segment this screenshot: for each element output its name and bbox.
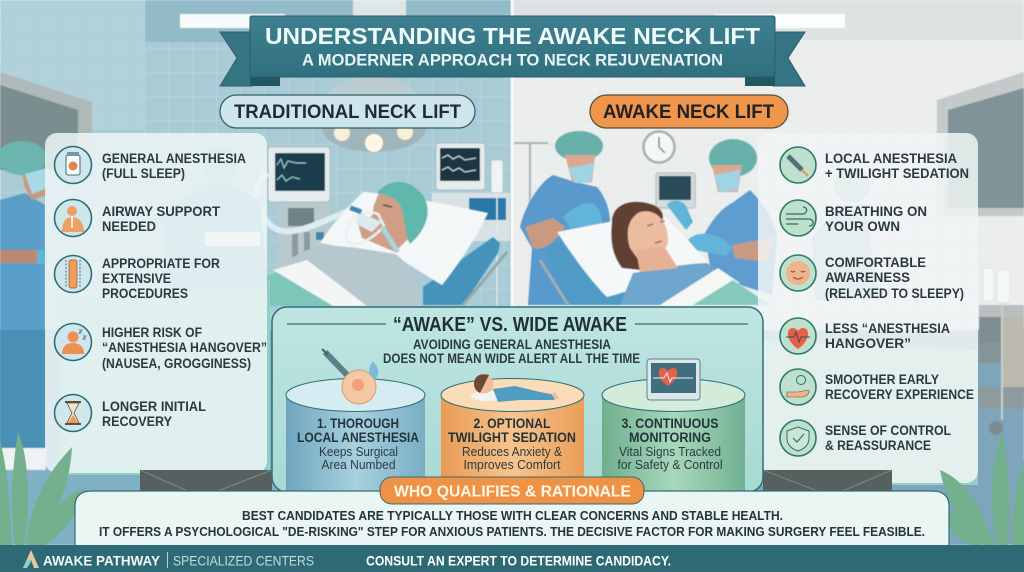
text: twilight sedation: 2. OPTIONAL — [474, 416, 550, 431]
text: rationale: IT OFFERS A PSYCHOLOGICAL "DE-RISKING" STEP FOR ANXIOUS PATIENTS. THE DECISIVE FACTOR FOR MAKING SURGERY FEEL FEASIBLE. — [99, 524, 925, 539]
text: extensive procedures: EXTENSIVE — [102, 271, 171, 286]
awake scene equipment — [514, 132, 695, 230]
icon: logo — [23, 550, 39, 568]
text: brand — [43, 552, 314, 568]
text: local anesthesia — [825, 151, 969, 181]
text: call to action: CONSULT AN EXPERT TO DETERMINE CANDIDACY. — [366, 552, 671, 568]
ghost surgeon behind left panel — [60, 147, 270, 475]
text: thorough local anesthesia: Keeps Surgical — [319, 445, 398, 459]
footer bar — [0, 545, 1024, 572]
subheading: A MODERNER APPROACH TO NECK REJUVENATION — [302, 52, 723, 70]
nurse two — [667, 139, 777, 295]
text: extensive procedures: APPROPRIATE FOR — [102, 256, 220, 271]
text: subtitle: DOES NOT MEAN WIDE ALERT ALL THE TIME — [383, 351, 640, 366]
text: general anesthesia — [102, 151, 246, 181]
text: comfortable awareness: COMFORTABLE — [825, 255, 926, 270]
text: continuous monitoring: for Safety & Control — [618, 458, 722, 472]
text: brand: AWAKE PATHWAY — [43, 552, 161, 568]
text: local anesthesia: LOCAL ANESTHESIA — [825, 151, 957, 166]
cart with bottles — [979, 268, 1024, 435]
text: thorough local anesthesia: 1. THOROUGH — [317, 416, 399, 431]
text: continuous monitoring: MONITORING — [629, 430, 711, 445]
text: longer recovery: RECOVERY — [102, 414, 172, 429]
icon: relaxed face — [780, 255, 816, 291]
panel: who qualifies and rationale — [75, 477, 949, 546]
text: comfortable awareness — [825, 255, 964, 301]
text: airway support: NEEDED — [102, 219, 156, 234]
text: subtitle — [383, 337, 640, 366]
text: extensive procedures: PROCEDURES — [102, 286, 188, 301]
pill: traditional neck lift — [220, 95, 475, 128]
text: sense of control: & REASSURANCE — [825, 438, 931, 453]
icon: airway — [54, 200, 92, 236]
text: extensive procedures — [102, 256, 220, 301]
panel: awake vs wide awake — [272, 307, 763, 492]
background: traditional operating room — [0, 0, 511, 545]
text: sense of control: SENSE OF CONTROL — [825, 423, 951, 438]
icon: hand — [780, 369, 816, 405]
title banner — [220, 16, 805, 86]
pill: awake neck lift: AWAKE NECK LIFT — [603, 102, 774, 123]
text: continuous monitoring — [618, 416, 722, 472]
text: breathing on your own: BREATHING ON — [825, 204, 927, 219]
icon: breath — [780, 200, 816, 236]
text: less anesthesia hangover — [825, 321, 950, 351]
icon: shield — [780, 420, 816, 456]
icon: extensive procedure — [54, 256, 92, 292]
heading: UNDERSTANDING THE AWAKE NECK LIFT — [265, 23, 760, 49]
text: airway support: AIRWAY SUPPORT — [102, 204, 221, 219]
text: general anesthesia: GENERAL ANESTHESIA — [102, 151, 246, 166]
text: less anesthesia hangover: LESS “ANESTHESIA — [825, 321, 950, 336]
text: twilight sedation: Reduces Anxiety & — [462, 445, 563, 459]
text: anesthesia hangover risk: HIGHER RISK OF — [102, 325, 202, 340]
text: longer recovery — [102, 399, 206, 429]
text: breathing on your own — [825, 204, 927, 234]
plants — [0, 432, 1024, 546]
surgical lamp — [320, 60, 426, 152]
text: sense of control — [825, 423, 951, 453]
icon: heart — [780, 318, 816, 354]
text: breathing on your own: YOUR OWN — [825, 219, 900, 234]
text: twilight sedation — [448, 416, 576, 472]
icon: vitals monitor — [647, 359, 700, 400]
text: anesthesia hangover risk: (NAUSEA, GROGGINESS) — [102, 356, 251, 371]
left benefits panel — [45, 133, 267, 473]
text: subtitle: AVOIDING GENERAL ANESTHESIA — [413, 337, 611, 352]
icon: groggy person — [54, 324, 92, 360]
icon: resting patient — [471, 374, 557, 402]
text: rationale — [99, 508, 925, 539]
bed bases — [140, 470, 892, 492]
text: smoother recovery: RECOVERY EXPERIENCE — [825, 387, 974, 402]
icon: syringe — [780, 147, 816, 183]
awake patient — [540, 202, 770, 305]
cylinder 3: continuous monitoring — [602, 359, 745, 492]
monitors and machines: traditional side — [256, 143, 510, 305]
patient under general anesthesia — [230, 182, 507, 306]
text: smoother recovery — [825, 372, 974, 402]
icon: anesthesia bottle — [54, 146, 92, 184]
pill: traditional neck lift: TRADITIONAL NECK LIFT — [234, 102, 461, 123]
heading: awake vs wide awake: “AWAKE” VS. WIDE AWAKE — [393, 314, 627, 336]
text: less anesthesia hangover: HANGOVER” — [825, 336, 911, 351]
cylinder 2: twilight sedation — [441, 374, 584, 492]
nurse one — [520, 131, 610, 305]
text: brand: SPECIALIZED CENTERS — [173, 552, 314, 568]
text: twilight sedation: TWILIGHT SEDATION — [448, 430, 576, 445]
text: continuous monitoring: Vital Signs Tracked — [619, 445, 721, 459]
text: general anesthesia: (FULL SLEEP) — [102, 166, 185, 181]
text: anesthesia hangover risk — [102, 325, 267, 371]
text: anesthesia hangover risk: “ANESTHESIA HANGOVER” — [102, 340, 267, 355]
right benefits panel — [758, 133, 978, 483]
pill: who qualifies — [380, 477, 644, 504]
text: comfortable awareness: (RELAXED TO SLEEPY) — [825, 286, 964, 301]
text: smoother recovery: SMOOTHER EARLY — [825, 372, 939, 387]
icon: hourglass — [54, 394, 92, 432]
text: thorough local anesthesia: LOCAL ANESTHESIA — [297, 430, 419, 445]
text: thorough local anesthesia — [297, 416, 419, 472]
ghost nurse behind right panel — [758, 167, 978, 485]
pill: who qualifies: WHO QUALIFIES & RATIONALE — [394, 484, 631, 500]
text: rationale: BEST CANDIDATES ARE TYPICALLY THOSE WITH CLEAR CONCERNS AND STABLE HEALTH. — [242, 508, 783, 523]
text: thorough local anesthesia: Area Numbed — [322, 458, 396, 472]
text: comfortable awareness: AWARENESS — [825, 270, 910, 285]
text: local anesthesia: + TWILIGHT SEDATION — [825, 166, 969, 181]
background: awake operating room — [511, 0, 1024, 545]
nurse left — [0, 141, 47, 470]
text: twilight sedation: Improves Comfort — [464, 458, 561, 472]
text: airway support — [102, 204, 221, 234]
pill: awake neck lift — [590, 95, 788, 128]
text: longer recovery: LONGER INITIAL — [102, 399, 206, 414]
icon: syringe and numbed skin — [322, 349, 378, 404]
cylinder 1: local anesthesia — [286, 349, 425, 492]
text: continuous monitoring: 3. CONTINUOUS — [622, 416, 718, 431]
